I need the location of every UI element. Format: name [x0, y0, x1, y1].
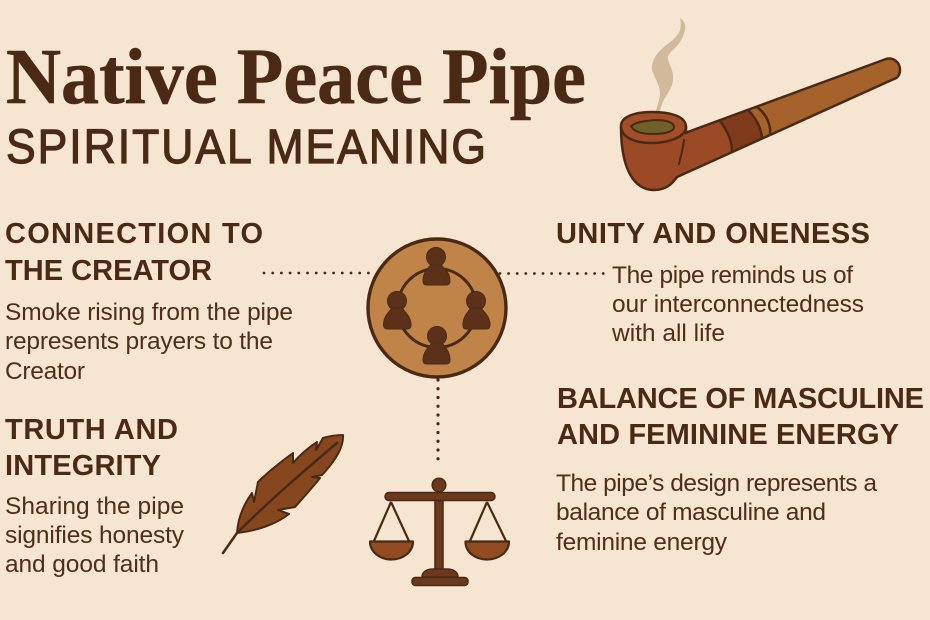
text: connection to the creator: Smoke rising from the pipe [5, 299, 293, 326]
icon: peace pipe with smoke [621, 18, 900, 190]
text: balance of masculine and feminine energy [556, 470, 877, 556]
text: connection to the creator [5, 299, 293, 385]
heading: balance of masculine and feminine energy: AND FEMININE ENERGY [557, 419, 899, 451]
text: unity and oneness [611, 262, 864, 347]
text: truth and integrity: and good faith [5, 551, 159, 578]
dotted connector: right [500, 272, 604, 275]
icon: balance scales [370, 478, 509, 586]
icon: feather [223, 435, 343, 553]
heading: unity and oneness: UNITY AND ONENESS [556, 218, 870, 250]
title: Native Peace Pipe [6, 34, 586, 121]
text: truth and integrity: Sharing the pipe [5, 493, 184, 520]
subtitle: SPIRITUAL MEANING [6, 119, 486, 173]
text: unity and oneness: our interconnectedness [612, 291, 864, 318]
heading: truth and integrity: TRUTH AND [5, 414, 178, 446]
text: connection to the creator: Creator [5, 358, 85, 385]
dotted connector: left [264, 272, 370, 274]
heading: truth and integrity [5, 414, 178, 482]
dotted connector: down [436, 380, 440, 459]
heading: connection to the creator: THE CREATOR [5, 255, 212, 287]
heading: balance of masculine and feminine energy [557, 383, 924, 451]
text: unity and oneness: The pipe reminds us of [612, 262, 853, 289]
heading: connection to the creator [5, 218, 263, 287]
text: balance of masculine and feminine energy: feminine energy [556, 529, 728, 556]
heading: connection to the creator: CONNECTION TO [5, 218, 263, 250]
text: connection to the creator: represents prayers to the [5, 328, 273, 355]
text: unity and oneness: with all life [611, 320, 725, 347]
text: truth and integrity [5, 493, 185, 578]
text: balance of masculine and feminine energy: The pipe’s design represents a [556, 470, 877, 497]
text: truth and integrity: signifies honesty [5, 522, 185, 549]
icon: circle of people [368, 239, 506, 377]
heading: balance of masculine and feminine energy: BALANCE OF MASCULINE [557, 383, 924, 415]
text: balance of masculine and feminine energy: balance of masculine and [556, 499, 826, 526]
heading: truth and integrity: INTEGRITY [5, 450, 161, 482]
